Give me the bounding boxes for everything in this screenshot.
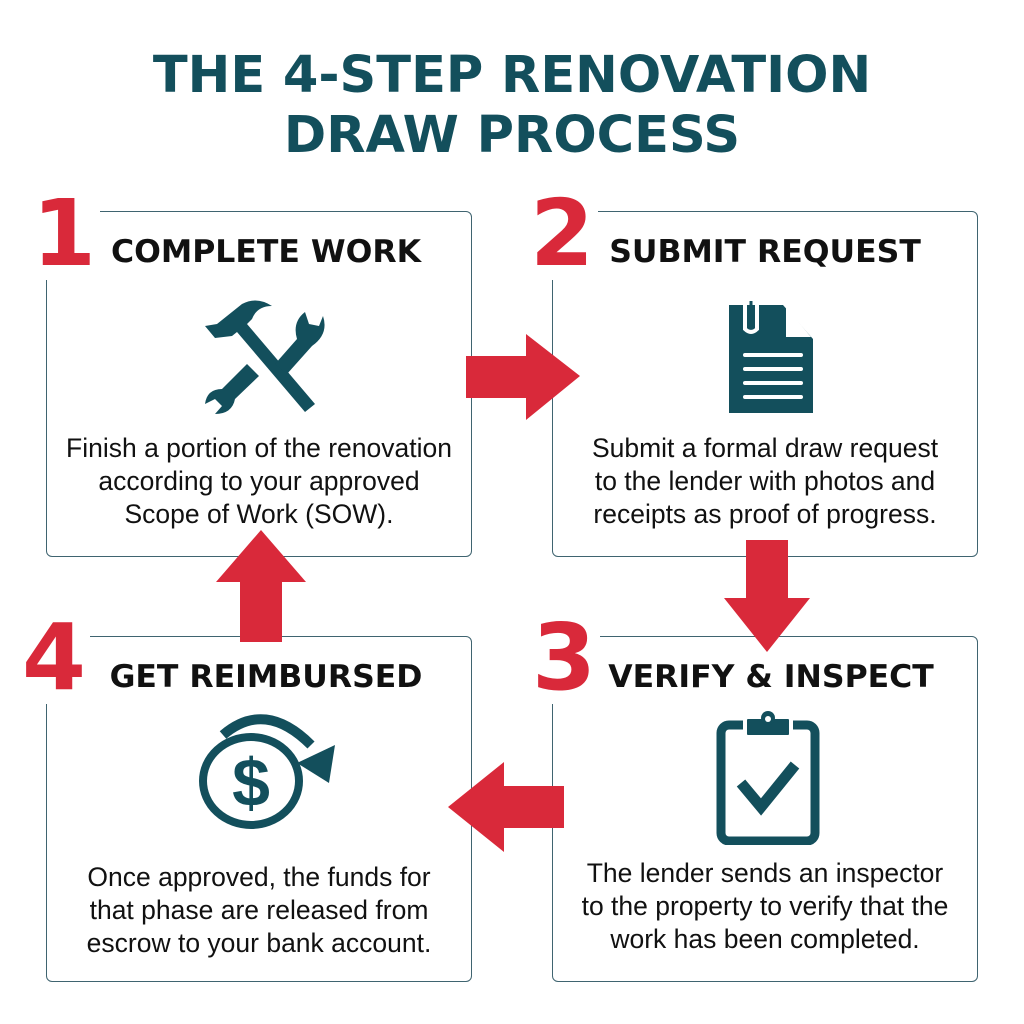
text 1 [66, 433, 452, 529]
text 3: The lender sends an inspector [587, 858, 943, 888]
text 4: escrow to your bank account. [87, 928, 431, 958]
text 3: to the property to verify that the [582, 891, 948, 921]
text 4: that phase are released from [90, 895, 428, 925]
title [153, 46, 871, 165]
heading 3: VERIFY & INSPECT [608, 659, 934, 695]
arrow: right [466, 334, 580, 420]
text 1: Scope of Work (SOW). [124, 499, 394, 529]
text 2: receipts as proof of progress. [593, 499, 937, 529]
heading 4: GET REIMBURSED [110, 659, 422, 695]
panel: step 3 [552, 636, 978, 982]
number 3: 3 [532, 604, 596, 711]
text 3: work has been completed. [610, 924, 920, 954]
arrow: down [724, 540, 810, 652]
text 2: Submit a formal draw request [592, 433, 938, 463]
heading 1: COMPLETE WORK [111, 234, 421, 270]
number 2: 2 [530, 180, 594, 287]
panel: step 1 [46, 211, 472, 557]
arrow: left [448, 762, 564, 852]
icon: clipboard [716, 711, 820, 845]
number 1: 1 [32, 180, 96, 287]
text 3 [582, 858, 948, 954]
icon: hammer and wrench [205, 300, 325, 414]
text 4: Once approved, the funds for [87, 862, 431, 892]
heading 2: SUBMIT REQUEST [609, 234, 921, 270]
panel: step 4 [46, 636, 472, 982]
text 1: Finish a portion of the renovation [66, 433, 452, 463]
icon: dollar coin [199, 714, 335, 829]
title: THE 4-STEP RENOVATION [153, 46, 871, 105]
panel: step 2 [552, 211, 978, 557]
text 2 [592, 433, 938, 529]
arrow: up [216, 530, 306, 642]
icon: document [729, 301, 813, 413]
title: DRAW PROCESS [284, 106, 740, 165]
text 4 [87, 862, 431, 958]
number 4: 4 [22, 604, 86, 711]
text 1: according to your approved [98, 466, 420, 496]
text 2: to the lender with photos and [595, 466, 935, 496]
icon: dollar coin: $ [232, 745, 270, 821]
